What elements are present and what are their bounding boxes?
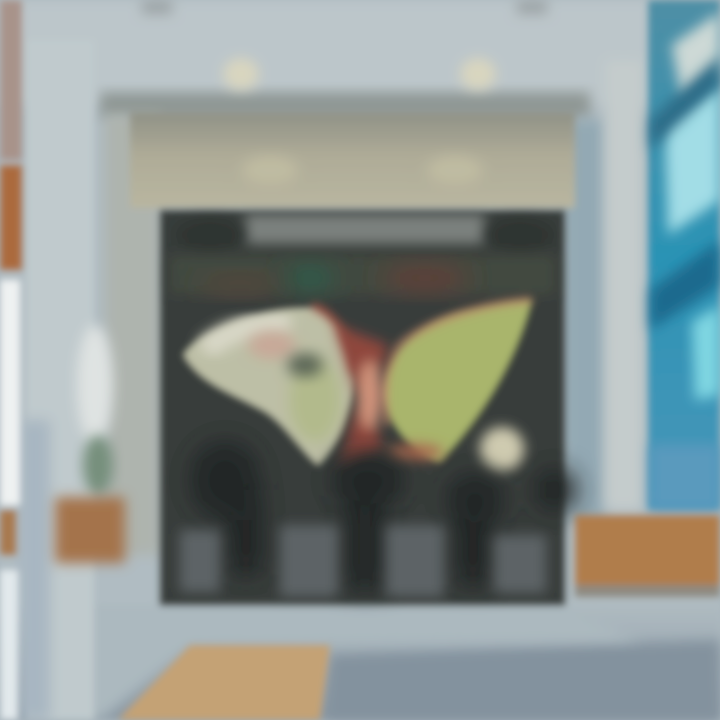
- plant pot: [55, 497, 125, 563]
- right wing: [383, 300, 532, 462]
- silhouettes at mural base: [189, 440, 577, 590]
- right window: [648, 0, 720, 510]
- left edge: wood and bright window: [0, 0, 22, 720]
- floor: [0, 600, 720, 720]
- upper wall band: [130, 112, 575, 208]
- left wing: [183, 306, 354, 466]
- right column: [605, 60, 643, 510]
- butterfly body: [335, 325, 443, 468]
- ceiling lights: [142, 0, 547, 90]
- round lamp on mural: [480, 427, 524, 471]
- plant: [83, 435, 113, 495]
- butterfly illustration: [183, 300, 532, 468]
- floor mat: wood: [118, 645, 330, 720]
- lower mural panels: [180, 525, 546, 597]
- wooden bench: [575, 515, 720, 597]
- dark mural board: [160, 210, 565, 605]
- left column: [20, 40, 94, 720]
- bright glow beside column: [77, 325, 113, 445]
